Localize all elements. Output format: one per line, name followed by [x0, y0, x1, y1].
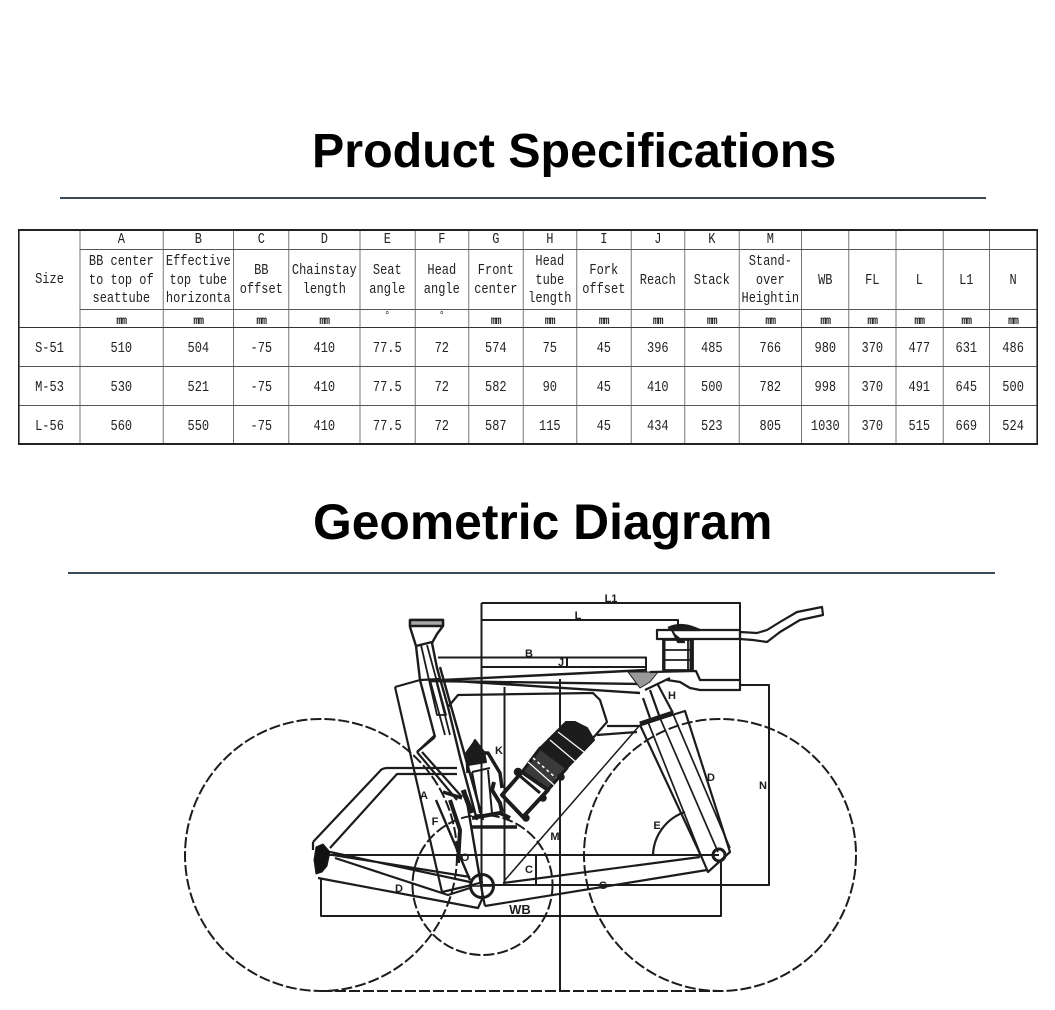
rear dropout	[314, 844, 330, 874]
table row: L-56: 524	[1002, 418, 1024, 435]
bottom bracket	[470, 874, 494, 898]
wheels and chainring	[185, 719, 856, 991]
dimension letters: C	[525, 864, 533, 876]
table row: S-51: 45	[597, 340, 611, 357]
dimension letters	[395, 593, 767, 917]
table row: M-53: -75	[250, 379, 272, 396]
table row: dimension letters: E	[384, 231, 391, 248]
table row: S-51: 504	[187, 340, 209, 357]
divider: diagram heading rule	[68, 572, 995, 574]
table row: dimension names: angle	[369, 281, 405, 298]
table row: L-56: 805	[759, 418, 781, 435]
table row: S-51: 410	[313, 340, 335, 357]
dimension letters: N	[759, 780, 767, 792]
table row: M-53: 530	[110, 379, 132, 396]
table row: M-53: M-53	[35, 379, 64, 396]
table row: dimension letters: D	[321, 231, 328, 248]
table row: S-51: -75	[250, 340, 272, 357]
frame	[395, 670, 707, 906]
table row: L-56: -75	[250, 418, 272, 435]
table row: S-51	[35, 340, 1024, 357]
small bottle	[467, 740, 517, 827]
table row: L-56: 115	[539, 418, 561, 435]
dimension letters: O	[461, 852, 470, 864]
table row: dimension names: tube	[535, 272, 564, 289]
table row: S-51: 77.5	[373, 340, 402, 357]
table row: L-56: 515	[908, 418, 930, 435]
table row: M-53: 782	[759, 379, 781, 396]
table row: dimension names: Heightin	[741, 290, 799, 307]
table row: S-51: 486	[1002, 340, 1024, 357]
table row: M-53: 500	[701, 379, 723, 396]
table row: M-53: 45	[597, 379, 611, 396]
dimension letters: M	[550, 831, 560, 843]
table row: M-53: 90	[543, 379, 557, 396]
table row: L-56: 370	[861, 418, 883, 435]
dimension letters: F	[432, 816, 439, 828]
table row: M-53: 77.5	[373, 379, 402, 396]
dimension letters: A	[420, 790, 428, 802]
seatpost and seat tube	[410, 620, 483, 897]
title: geometric diagram: Geometric Diagram	[313, 494, 772, 550]
table row: dimension letters: F	[438, 231, 445, 248]
table row: dimension letters: M	[767, 231, 774, 248]
table row: L-56: 434	[647, 418, 669, 435]
table row: M-53	[35, 379, 1024, 396]
table row: dimension names: over	[756, 272, 785, 289]
dimension letters: D	[395, 883, 403, 895]
table row: M-53: 410	[647, 379, 669, 396]
table row: dimension names: offset	[582, 281, 625, 298]
table row: S-51: 75	[543, 340, 557, 357]
table row: dimension names: Chainstay	[292, 262, 357, 279]
dimension letters: K	[495, 745, 503, 757]
table row: M-53: 370	[861, 379, 883, 396]
table row: dimension names: BB center	[89, 253, 154, 270]
table row: dimension names: horizonta	[166, 290, 231, 307]
table row: dimension letters: H	[546, 231, 553, 248]
table row: S-51: 477	[908, 340, 930, 357]
divider: specifications heading rule	[60, 197, 986, 199]
table row: L-56: 587	[485, 418, 507, 435]
rear triangle	[313, 735, 483, 908]
table row: dimension names: offset	[240, 281, 283, 298]
table row: L-56: 410	[313, 418, 335, 435]
table row: S-51: 370	[861, 340, 883, 357]
table row: dimension names: Seat	[373, 262, 402, 279]
table row: L-56: 77.5	[373, 418, 402, 435]
dimension letters: L1	[605, 593, 617, 605]
table row: L-56: 523	[701, 418, 723, 435]
table row: M-53: 582	[485, 379, 507, 396]
table row: dimension names: seattube	[92, 290, 150, 307]
table row: dimension letters: A	[118, 231, 125, 248]
table row: S-51: 574	[485, 340, 507, 357]
dimension letters: WB	[509, 902, 531, 917]
table: geometry by frame size: Size	[35, 271, 64, 288]
table row: L-56: 72	[435, 418, 449, 435]
table row: dimension names: L	[916, 272, 923, 289]
large bottle	[502, 722, 594, 820]
table row: dimension names: Stack	[694, 272, 730, 289]
table row: dimension letters: I	[600, 231, 607, 248]
table row: S-51: 72	[435, 340, 449, 357]
table row: M-53: 410	[313, 379, 335, 396]
table row: dimension names: BB	[254, 262, 268, 279]
dimension letters: H	[668, 690, 676, 702]
table row: dimension letters: K	[708, 231, 715, 248]
table row: dimension names: WB	[818, 272, 832, 289]
table row: dimension names: FL	[865, 272, 880, 289]
table row: dimension names: L1	[959, 272, 974, 289]
table row: L-56: 560	[110, 418, 132, 435]
table row: S-51: 766	[759, 340, 781, 357]
cockpit and aerobar	[650, 607, 823, 690]
table row: dimension names: Fork	[589, 262, 618, 279]
table row: M-53: 645	[955, 379, 977, 396]
table row: S-51: S-51	[35, 340, 64, 357]
table row: dimension names: top tube	[169, 272, 227, 289]
table row: M-53: 521	[187, 379, 209, 396]
table row: dimension names: Front	[478, 262, 514, 279]
dimension letters: B	[525, 648, 533, 660]
table row: dimension names: N	[1009, 272, 1017, 289]
dimension letters: L	[575, 610, 582, 622]
dimension letters: D	[707, 772, 715, 784]
table row: L-56: 669	[955, 418, 977, 435]
dimension lines	[321, 603, 769, 991]
table row: dimension names: to top of	[89, 272, 154, 289]
dimension letters: E	[653, 820, 661, 832]
table row: dimension names: Stand-	[749, 253, 792, 270]
table row: dimension names: Head	[535, 253, 564, 270]
table row: dimension letters: C	[258, 231, 265, 248]
table row: dimension letters: B	[195, 231, 202, 248]
table row: L-56: 1030	[811, 418, 840, 435]
table row: S-51: 980	[814, 340, 836, 357]
dimension letters: G	[599, 880, 607, 892]
table row: L-56: L-56	[35, 418, 64, 435]
table row: dimension letters: G	[492, 231, 499, 248]
table row: S-51: 510	[110, 340, 132, 357]
table row: dimension names: Effective	[166, 253, 231, 270]
table row: L-56: 550	[187, 418, 209, 435]
table: geometry by frame size	[18, 229, 1038, 445]
table row: units	[116, 310, 1019, 328]
table row: M-53: 491	[908, 379, 930, 396]
table row: L-56: 45	[597, 418, 611, 435]
table row: dimension letters: J	[654, 231, 661, 248]
title: product specifications: Product Specifications	[312, 124, 836, 178]
table row: dimension names: angle	[424, 281, 460, 298]
table row: dimension names: Head	[427, 262, 456, 279]
fork and head tube	[628, 672, 730, 872]
table row: dimension names: center	[474, 281, 517, 298]
dimension letters: J	[558, 657, 564, 669]
table row: S-51: 631	[955, 340, 977, 357]
table row: S-51: 485	[701, 340, 723, 357]
table row: L-56	[35, 418, 1024, 435]
table row: dimension letters	[35, 231, 774, 288]
table row: dimension names: Reach	[640, 272, 676, 289]
table row: dimension names	[89, 253, 1017, 307]
table row: dimension names: length	[528, 290, 571, 307]
table row: dimension names: length	[303, 281, 346, 298]
table row: M-53: 998	[814, 379, 836, 396]
table row: S-51: 396	[647, 340, 669, 357]
table row: M-53: 72	[435, 379, 449, 396]
table row: M-53: 500	[1002, 379, 1024, 396]
